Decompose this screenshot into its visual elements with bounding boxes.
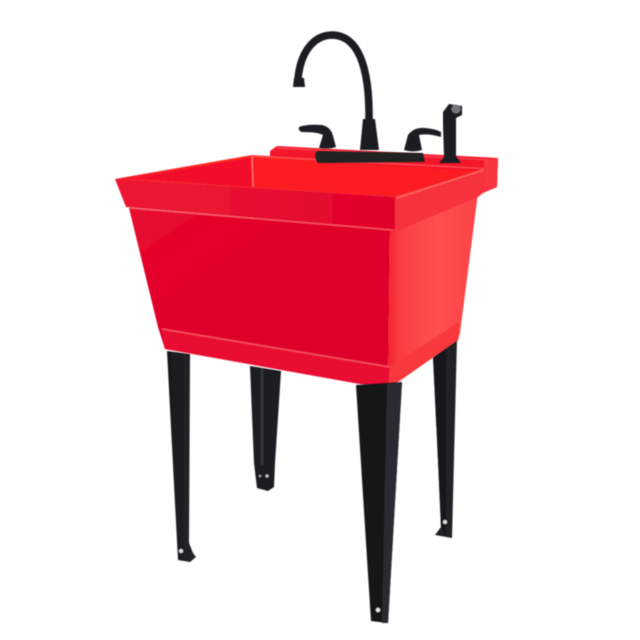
sink basin [115,155,485,389]
deck plate [315,151,425,163]
right rim [395,168,485,232]
leg: back left [250,366,281,491]
side sprayer [439,104,462,163]
spout [298,35,369,122]
right wall [388,193,478,389]
nozzle [293,78,305,87]
front rim [115,179,395,230]
left handle [299,125,336,149]
sprayer head [452,104,460,114]
back deck of the sink [270,146,498,193]
right handle [404,128,441,152]
leg: right [433,338,457,538]
bottom band [162,329,390,389]
spout base [360,119,379,150]
faucet [293,35,462,163]
basin interior [115,155,485,197]
leg: left [167,351,196,562]
front wall [129,208,390,389]
leg: front [356,382,402,623]
